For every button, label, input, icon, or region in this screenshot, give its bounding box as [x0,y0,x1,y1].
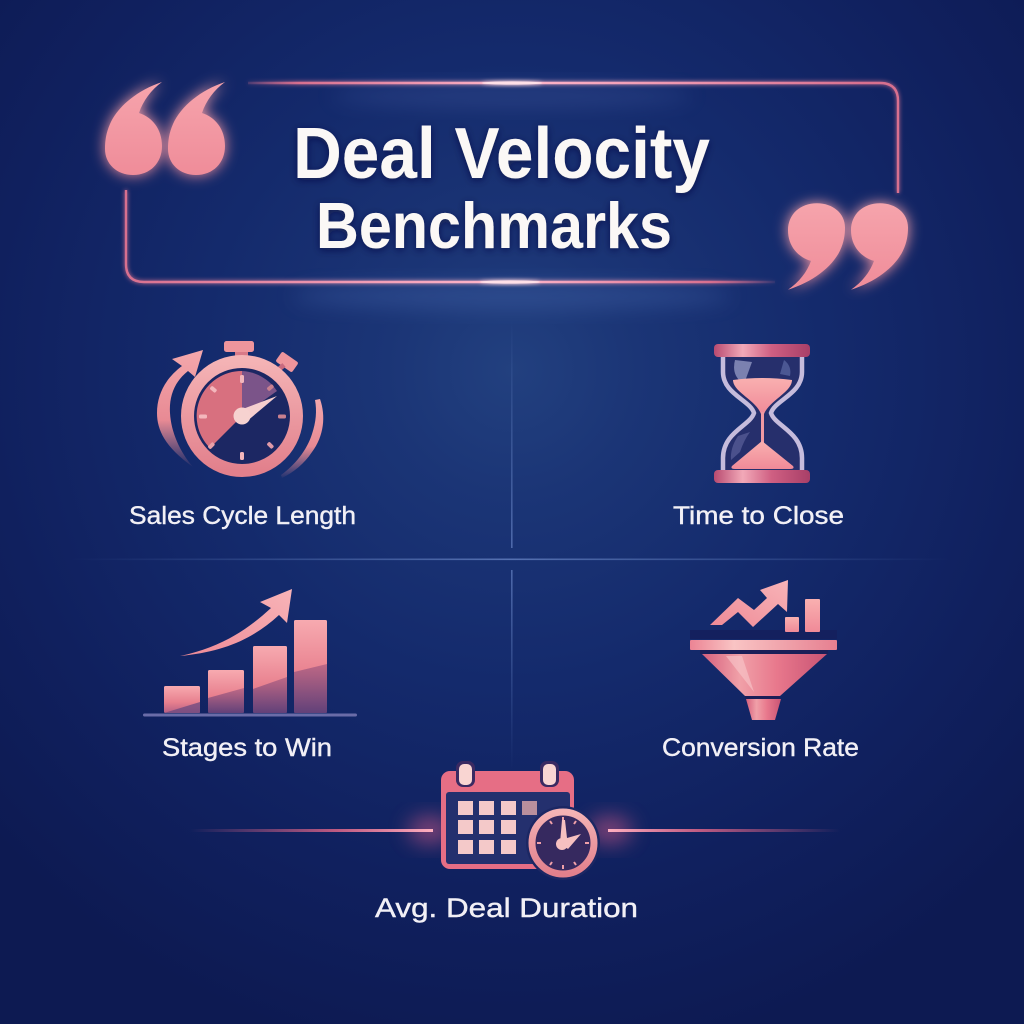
label: Conversion Rate: Conversion Rate [662,734,859,762]
icon: closing quote mark [788,203,908,290]
label: Avg. Deal Duration: Avg. Deal Duration [375,893,638,923]
icon: bar chart with rising arrow [143,589,357,716]
icon: calendar with clock [441,761,600,880]
icon: opening quote mark [105,82,225,175]
title: Deal Velocity [293,114,710,194]
title [293,114,710,262]
title: Benchmarks [316,189,672,262]
label: Sales Cycle Length: Sales Cycle Length [129,502,356,530]
section dividers [70,320,950,770]
label: Time to Close: Time to Close [673,502,844,530]
connector lines beside calendar [190,816,840,844]
icon: hourglass [714,344,810,483]
icon: funnel with trend arrow [690,580,837,720]
panel: title frame [126,81,898,310]
label: Stages to Win: Stages to Win [162,734,332,762]
icon: stopwatch [157,341,323,478]
